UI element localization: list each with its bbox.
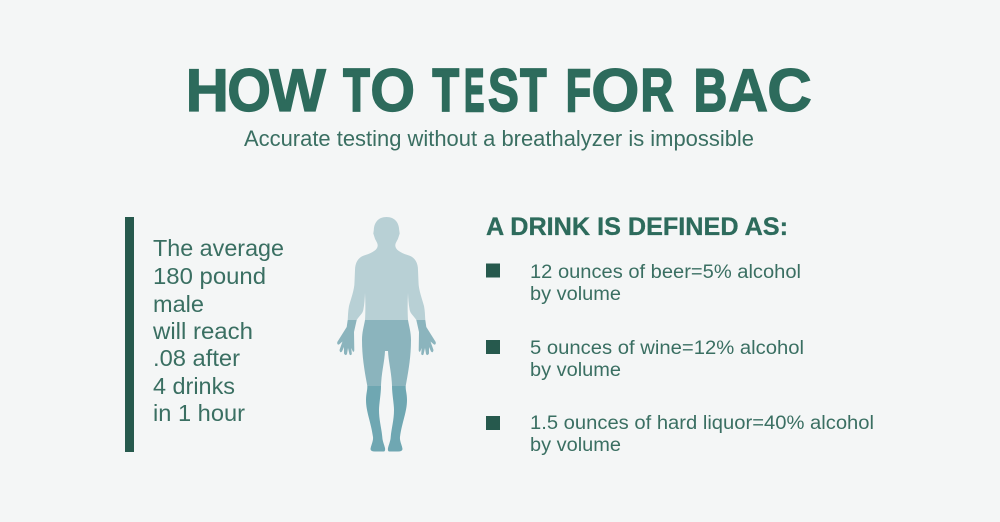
definitions heading: A DRINK IS DEFINED AS:: [486, 213, 788, 241]
wine text: [530, 338, 804, 381]
panel: drink definitions: [486, 213, 874, 456]
liquor text: [530, 413, 874, 456]
title: O: [227, 57, 271, 124]
title: F: [566, 57, 591, 124]
title: T: [343, 57, 370, 124]
definition: hard liquor: [486, 413, 874, 456]
icon: human body silhouette: [337, 217, 436, 452]
subtitle: Accurate testing without a breathalyzer is impossible: [244, 126, 754, 151]
title: B: [694, 57, 727, 124]
bullet: [486, 264, 500, 278]
callout text: The average: [153, 235, 284, 261]
bullet: [486, 416, 500, 430]
liquor text: 1.5 ounces of hard liquor=40% alcohol: [530, 413, 874, 434]
title: T: [520, 57, 546, 124]
callout text: 4 drinks: [153, 373, 235, 399]
callout accent bar: [125, 217, 134, 452]
title: A: [728, 57, 768, 124]
title: O: [370, 57, 415, 124]
beer text: by volume: [530, 284, 621, 305]
title: S: [488, 57, 519, 124]
title: T: [432, 57, 459, 124]
wine text: by volume: [530, 360, 621, 381]
callout text: 180 pound: [153, 263, 266, 289]
title: R: [641, 57, 673, 124]
title: C: [767, 57, 812, 124]
callout text: .08 after: [153, 345, 240, 371]
title: O: [591, 57, 639, 124]
callout text: [152, 235, 284, 426]
body band: upper torso: [348, 217, 426, 320]
callout text: male: [153, 291, 204, 317]
wine text: 5 ounces of wine=12% alcohol: [530, 338, 804, 359]
beer text: 12 ounces of beer=5% alcohol: [530, 262, 801, 283]
title: W: [269, 57, 326, 124]
title: E: [464, 57, 484, 124]
bullet: [486, 340, 500, 354]
infographic canvas: [125, 68, 873, 455]
callout text: in 1 hour: [153, 400, 245, 426]
title: H: [186, 57, 229, 124]
definition: beer: [486, 262, 801, 305]
body band: hips and thighs: [337, 320, 436, 386]
liquor text: by volume: [530, 435, 621, 456]
definition: wine: [486, 338, 804, 381]
beer text: [530, 262, 801, 305]
callout text: will reach: [152, 318, 253, 344]
panel: average male callout: [125, 217, 284, 452]
body band: lower legs: [366, 386, 407, 452]
